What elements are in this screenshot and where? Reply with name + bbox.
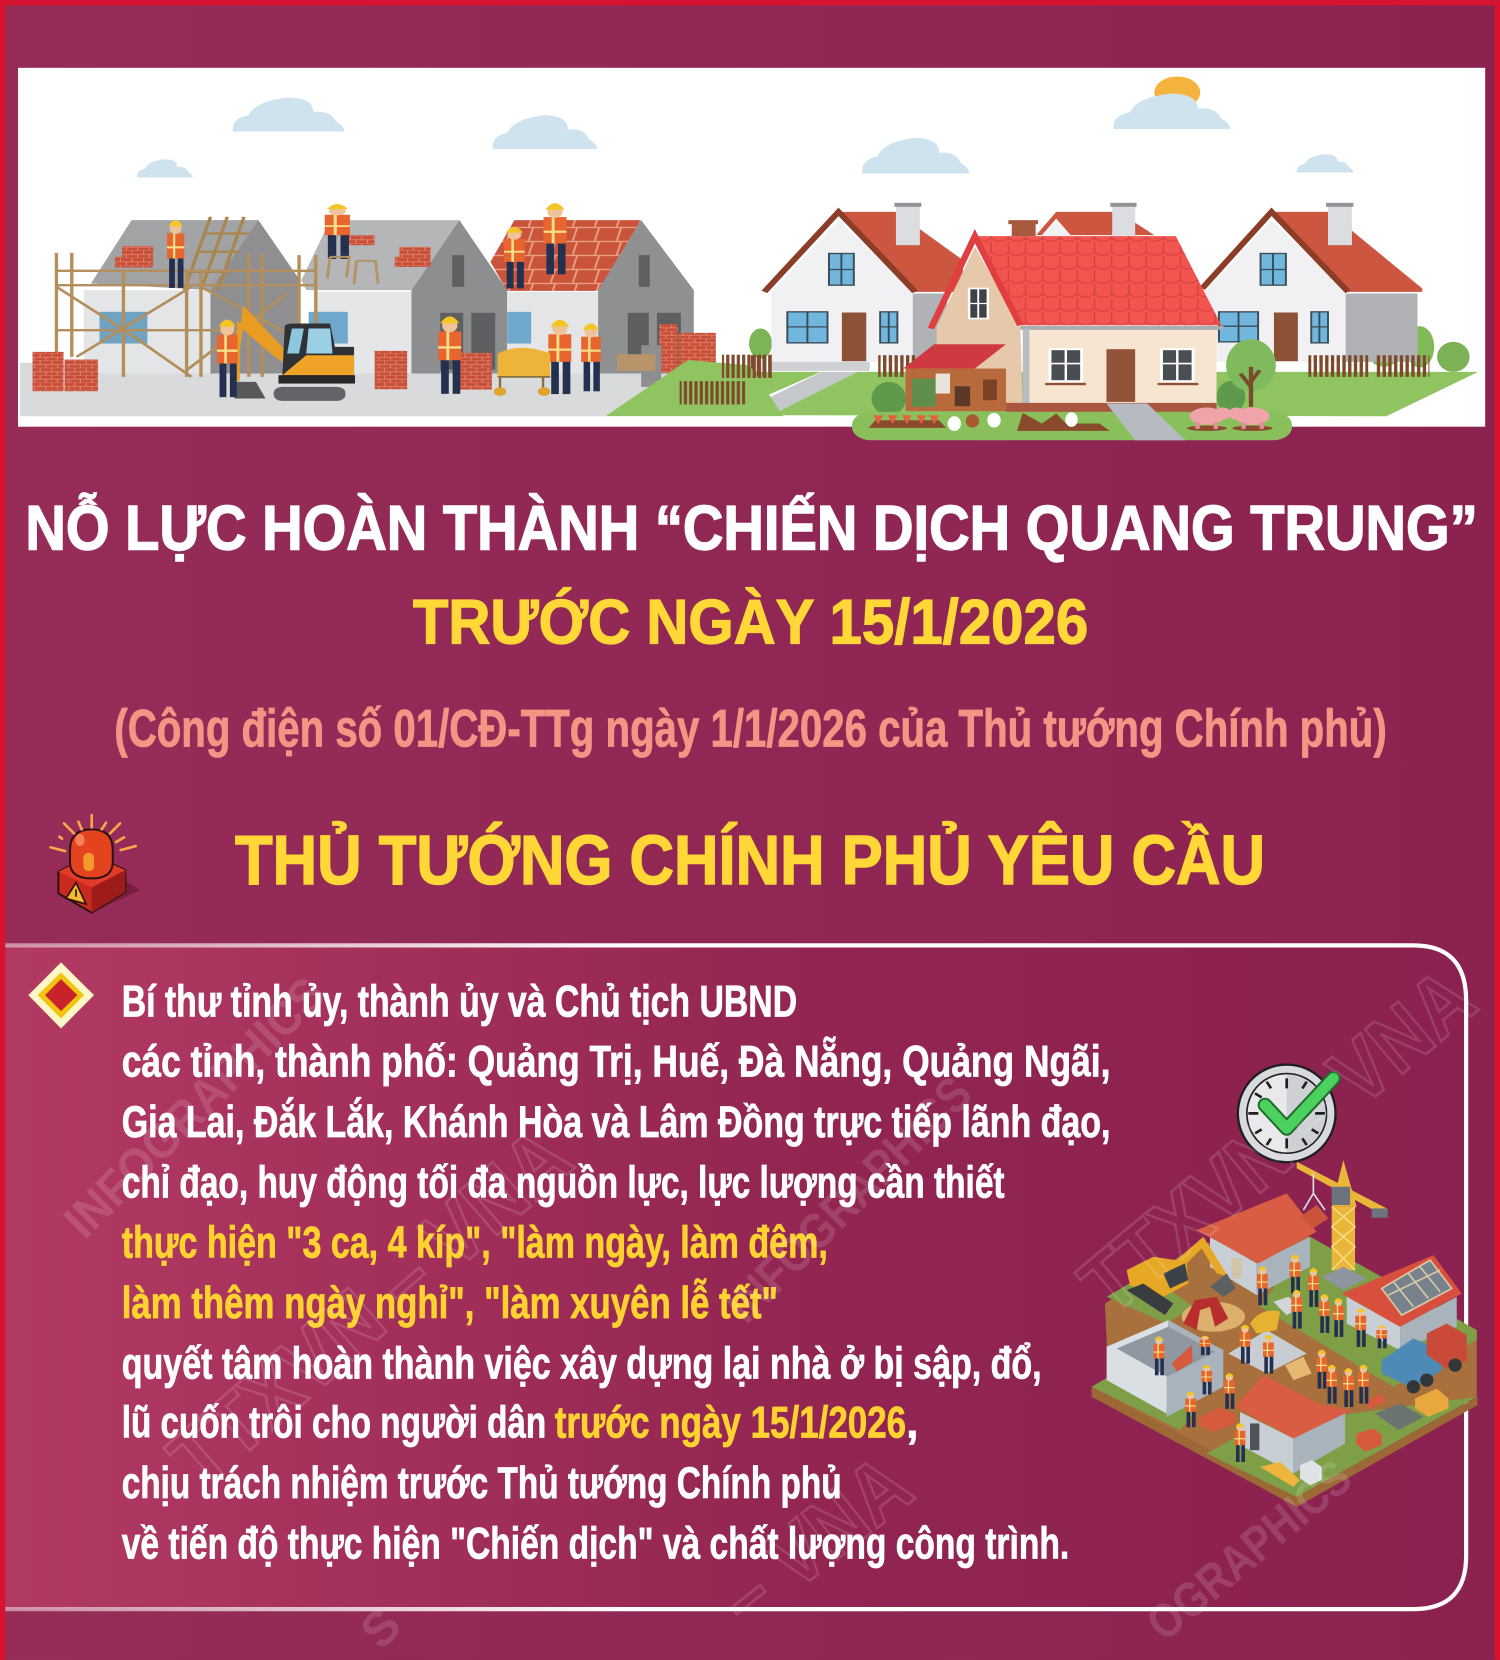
mixer small bbox=[1250, 1311, 1280, 1333]
house back bbox=[1197, 1193, 1328, 1295]
body text: lũ cuốn trôi cho người dân bbox=[122, 1399, 546, 1448]
garden strip bbox=[852, 404, 1292, 440]
excavator bbox=[234, 309, 355, 401]
watermarks: – VNA bbox=[699, 1436, 928, 1644]
body text: làm thêm ngày nghỉ", "làm xuyên lễ tết" bbox=[122, 1278, 778, 1328]
body text: , bbox=[906, 1399, 918, 1448]
icon: clock with green check bbox=[1237, 1063, 1337, 1163]
body text: chịu trách nhiệm trước Thủ tướng Chính phủ bbox=[122, 1459, 842, 1508]
right house bbox=[1202, 203, 1422, 362]
watermarks bbox=[54, 949, 1492, 1659]
body text: các tỉnh, thành phố: Quảng Trị, Huế, Đà Nẵng, Quảng Ngãi, bbox=[122, 1036, 1110, 1087]
bushes bbox=[749, 326, 1470, 372]
scaffolding bbox=[56, 253, 316, 377]
small fence foreground bbox=[680, 381, 745, 404]
body text: quyết tâm hoàn thành việc xây dựng lại nhà ở bị sập, đổ, bbox=[122, 1339, 1042, 1388]
back house bbox=[1008, 203, 1154, 236]
body text: Gia Lai, Đắk Lắk, Khánh Hòa và Lâm Đồng trực tiếp lãnh đạo, bbox=[122, 1097, 1110, 1147]
icon: red siren bbox=[51, 815, 140, 913]
body text: thực hiện "3 ca, 4 kíp", "làm ngày, làm đêm, bbox=[122, 1219, 828, 1268]
watermarks: INFOGRAPHICS bbox=[716, 1067, 982, 1333]
subtitle: deadline: TRƯỚC NGÀY 15/1/2026 bbox=[413, 588, 1088, 658]
open room bbox=[1107, 1320, 1223, 1417]
fences bbox=[750, 355, 1429, 377]
illustration: isometric construction site bbox=[1092, 1160, 1477, 1507]
illustration: finished village houses bbox=[749, 76, 1478, 440]
panel: illustration banner bbox=[18, 68, 1485, 440]
platform bbox=[1092, 1237, 1477, 1507]
watermarks: TTXVN – VNA bbox=[151, 1108, 588, 1506]
icon: diamond bullet bbox=[28, 962, 94, 1028]
house front bbox=[1235, 1375, 1352, 1474]
house right bbox=[1342, 1255, 1462, 1350]
left house bbox=[764, 203, 963, 371]
front house bbox=[872, 236, 1245, 415]
lean-to shed bbox=[903, 344, 1006, 411]
workers bbox=[167, 203, 601, 397]
brick stacks bbox=[33, 235, 716, 391]
pump and timber bbox=[617, 345, 661, 387]
illustration: houses under construction bbox=[20, 97, 718, 416]
heading: prime minister requests: THỦ TƯỚNG CHÍNH PHỦ YÊU CẦU bbox=[235, 820, 1265, 899]
mixer bbox=[494, 348, 550, 396]
lawns bbox=[750, 372, 1478, 416]
crane bbox=[1297, 1160, 1388, 1290]
grass edge between the two scenes bbox=[606, 360, 783, 416]
body text: trước ngày 15/1/2026 bbox=[555, 1399, 906, 1448]
panel: request content bbox=[5, 945, 1477, 1609]
yellow excavator bbox=[1127, 1237, 1236, 1315]
body text: chỉ đạo, huy động tối đa nguồn lực, lực lượng cần thiết bbox=[122, 1158, 1005, 1207]
red excavator bbox=[1183, 1297, 1228, 1330]
watermarks: INFOGRAPHICS bbox=[54, 967, 336, 1249]
body text: Bí thư tỉnh ủy, thành ủy và Chủ tịch UBND bbox=[122, 977, 797, 1026]
body text bbox=[122, 977, 1110, 1568]
stools bbox=[327, 257, 378, 284]
materials bbox=[1198, 1297, 1448, 1487]
blue truck bbox=[1382, 1323, 1467, 1393]
body text: về tiến độ thực hiện "Chiến dịch" và chất lượng công trình. bbox=[122, 1519, 1069, 1568]
watermarks: S bbox=[351, 1598, 412, 1659]
small fence rear bbox=[722, 355, 773, 378]
workers group bbox=[1154, 1255, 1387, 1462]
watermarks: OGRAPHICS bbox=[1137, 1450, 1362, 1651]
tree bbox=[1226, 339, 1276, 407]
